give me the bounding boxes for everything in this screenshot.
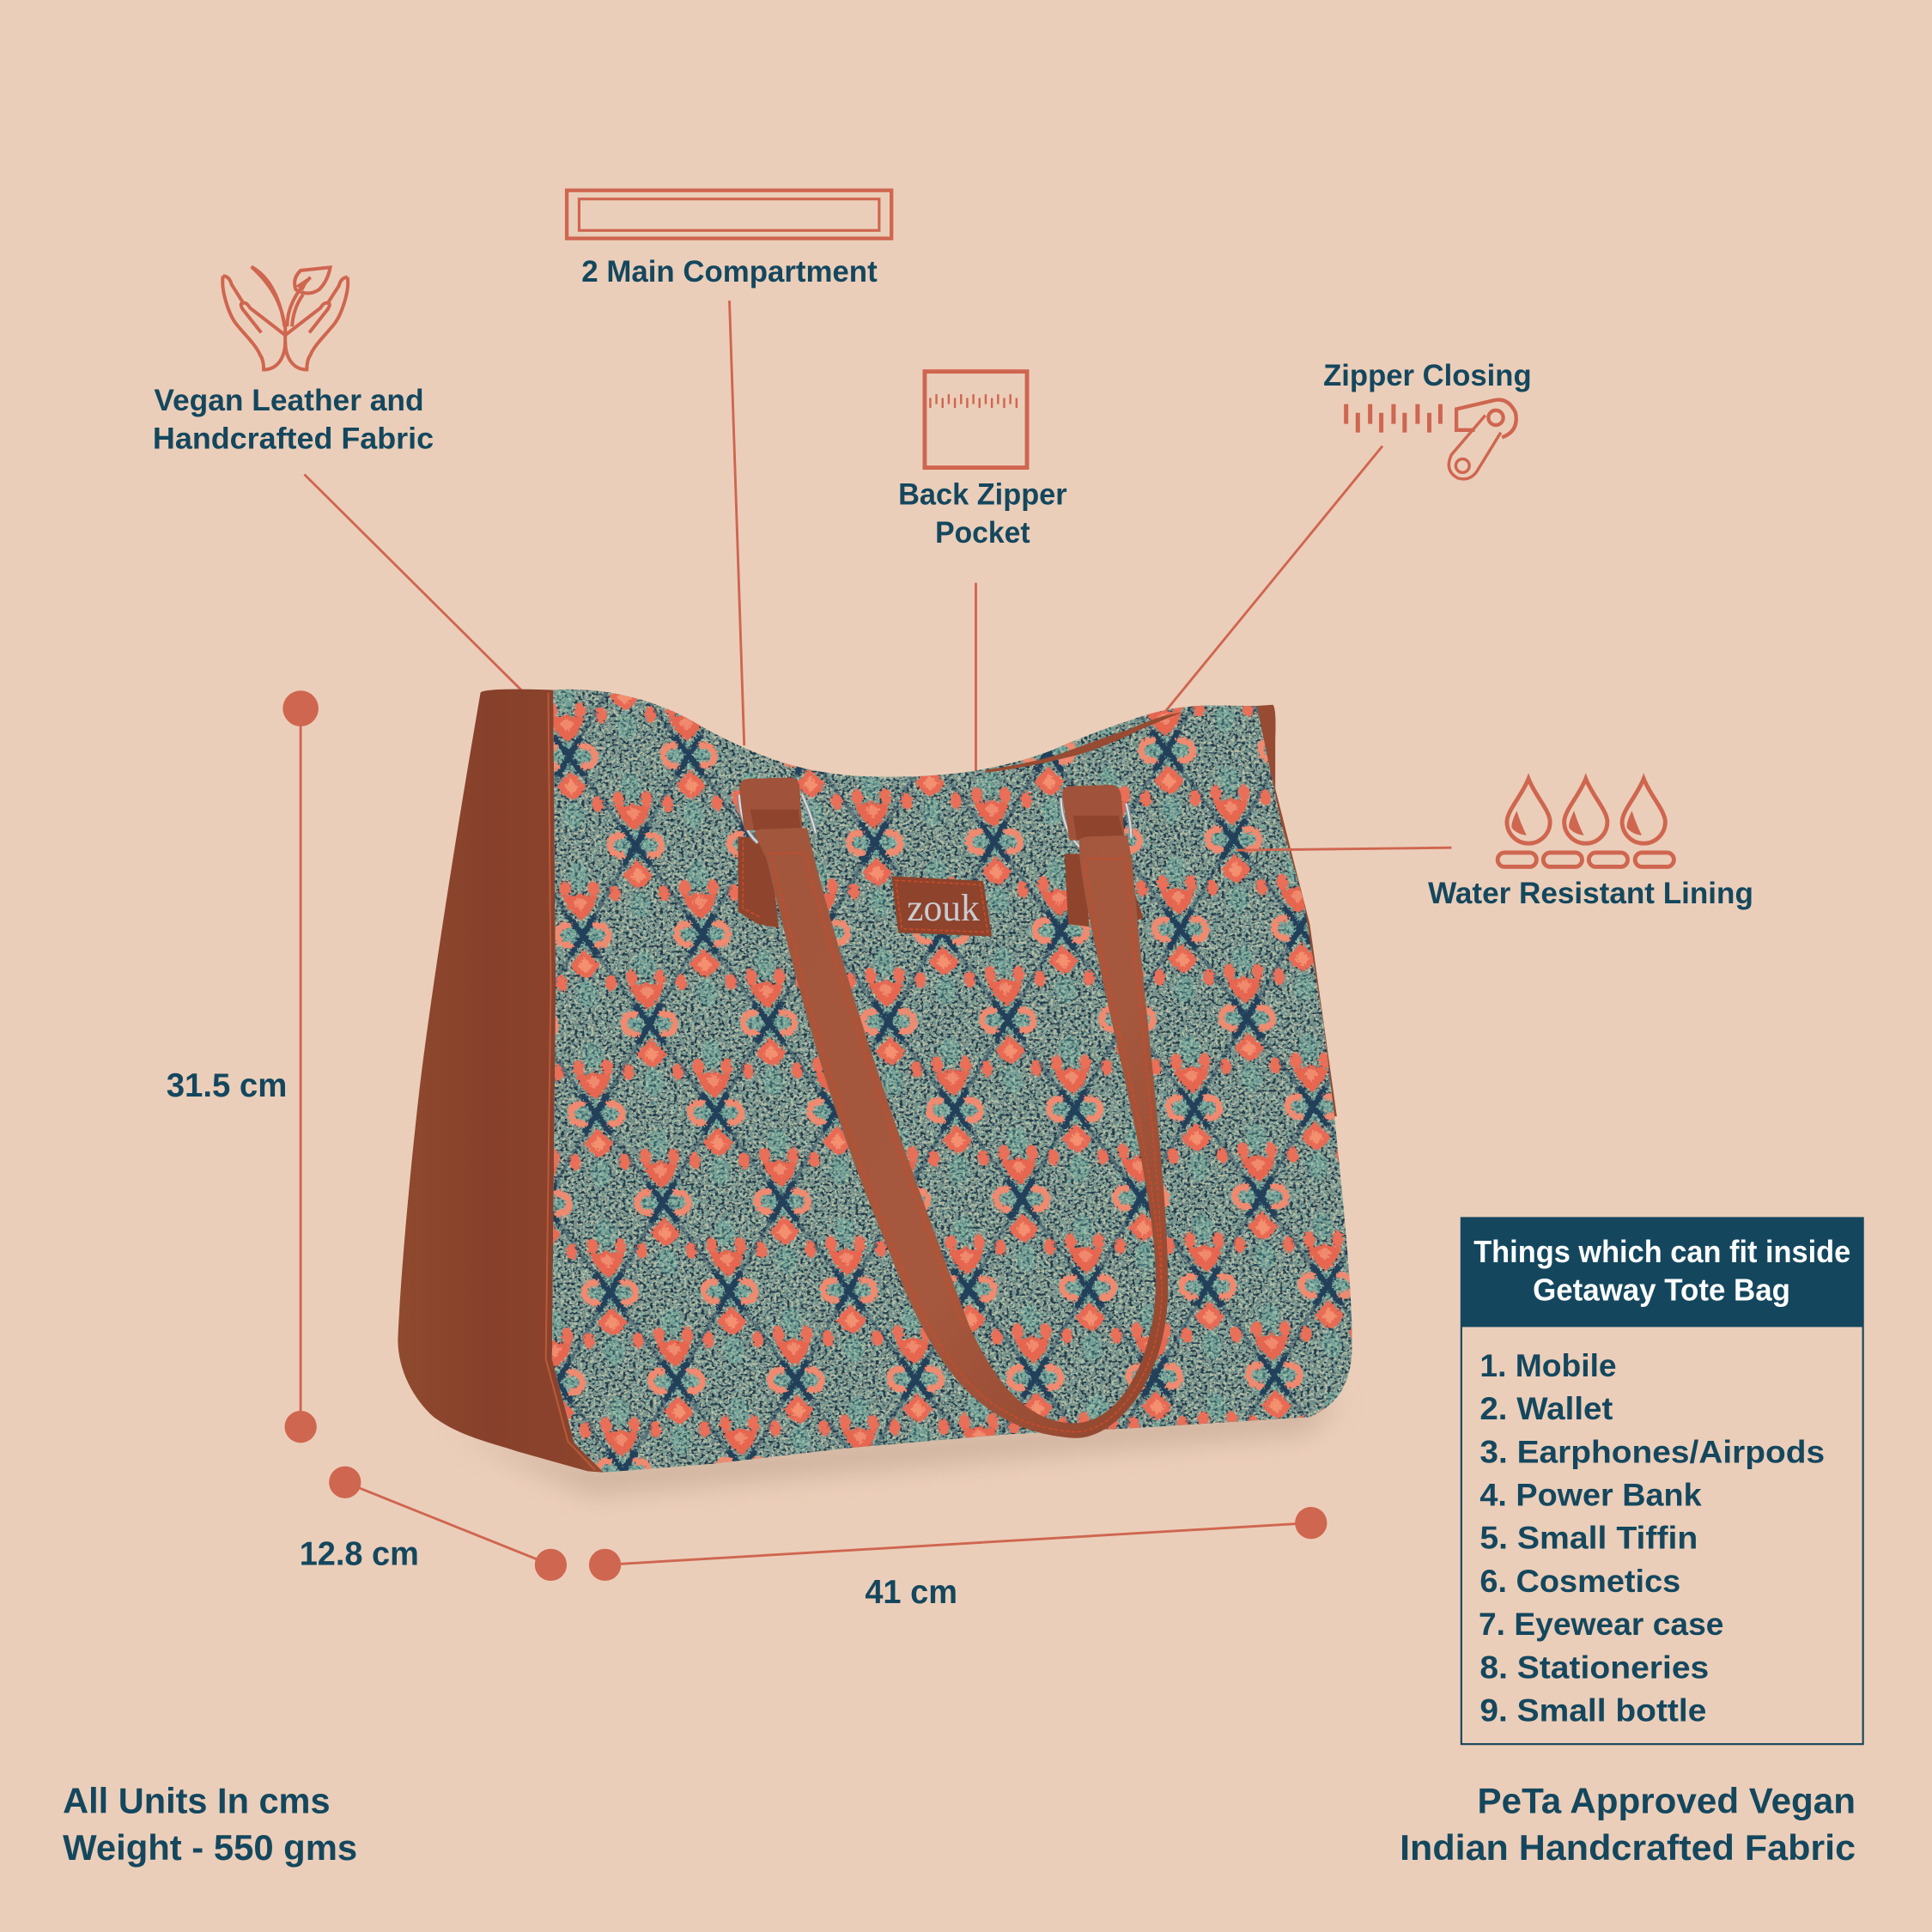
leader line: main compartment [729, 301, 744, 745]
metal ring right [1060, 799, 1131, 849]
panel: things which can fit inside [1461, 1218, 1863, 1744]
footnote: certification: Indian Handcrafted Fabric [1400, 1827, 1856, 1868]
label: zipper closing: Zipper Closing [1323, 359, 1532, 392]
label: vegan leather: Vegan Leather and [154, 384, 424, 417]
label: width: 41 cm [865, 1574, 957, 1611]
logo tag stitching [896, 880, 987, 933]
footnote: units and weight: All Units In cms [63, 1781, 331, 1821]
label: water resistant lining: Water Resistant Lining [1428, 877, 1753, 910]
panel heading [1473, 1235, 1850, 1308]
upper tab left [739, 777, 802, 830]
strap stitching [769, 853, 1162, 1432]
upper tab right [1062, 785, 1125, 841]
side panel seam [546, 692, 595, 1470]
panel list: 6. Cosmetics [1479, 1563, 1680, 1599]
icon: water drops on lining [1498, 779, 1674, 866]
leader line: back zipper pocket [975, 583, 976, 773]
panel list: 5. Small Tiffin [1479, 1520, 1698, 1556]
panel heading: Getaway Tote Bag [1533, 1273, 1790, 1308]
panel list: 8. Stationeries [1479, 1649, 1709, 1685]
panel border [1461, 1218, 1863, 1744]
panel list: 3. Earphones/Airpods [1479, 1433, 1825, 1469]
label: vegan leather: Handcrafted Fabric [153, 422, 434, 455]
logo text: zouk [907, 886, 981, 929]
panel list: 4. Power Bank [1479, 1477, 1702, 1513]
metal ring left [739, 795, 816, 843]
back strap tab left [738, 836, 779, 928]
label: depth: 12.8 cm [300, 1535, 419, 1572]
back strap tab right [1065, 854, 1144, 927]
panel list: 1. Mobile [1479, 1347, 1617, 1383]
panel heading: Things which can fit inside [1473, 1235, 1850, 1269]
icon: zipper slider [1346, 400, 1516, 479]
panel header [1461, 1218, 1863, 1327]
footnote: units and weight: Weight - 550 gms [63, 1827, 357, 1868]
label: back zipper pocket [898, 478, 1067, 550]
panel list [1479, 1347, 1825, 1728]
upper tab shade left [750, 810, 801, 830]
upper tab shade right [1073, 816, 1124, 841]
dimension: width [589, 1507, 1327, 1581]
metal ring highlight left [739, 795, 816, 843]
logo tag [891, 876, 992, 937]
footnote: certification [1400, 1781, 1856, 1868]
bag shadow [450, 1399, 1343, 1493]
panel list: 2. Wallet [1479, 1390, 1613, 1426]
dimension: depth [329, 1467, 567, 1581]
leader line: zipper closing [1161, 446, 1382, 717]
straps [754, 828, 1168, 1438]
icon: hands with sprout [222, 267, 348, 369]
panel list: 9. Small bottle [1479, 1692, 1706, 1728]
leader line: water resistant lining [1236, 848, 1451, 850]
label: vegan leather [153, 384, 434, 455]
label: back zipper pocket: Back Zipper [898, 478, 1067, 512]
label: main compartment: 2 Main Compartment [581, 255, 878, 289]
footnote: units and weight [63, 1781, 357, 1868]
product photo: tote bag [398, 677, 1380, 1491]
top zipper strip [985, 712, 1183, 773]
panel list: 7. Eyewear case [1479, 1606, 1723, 1642]
icon: back zipper pocket [925, 372, 1027, 468]
metal ring highlight right [1060, 799, 1131, 849]
dimension: height [283, 690, 319, 1443]
leader line: vegan leather [304, 474, 521, 690]
back panel edge [1255, 705, 1337, 1116]
side leather panel [398, 690, 604, 1473]
icon: main compartment [567, 191, 891, 239]
patterned fabric front [542, 677, 1380, 1491]
label: height: 31.5 cm [167, 1067, 287, 1104]
footnote: certification: PeTa Approved Vegan [1478, 1781, 1856, 1821]
label: back zipper pocket: Pocket [935, 516, 1030, 550]
back tab stitching left [743, 841, 762, 918]
